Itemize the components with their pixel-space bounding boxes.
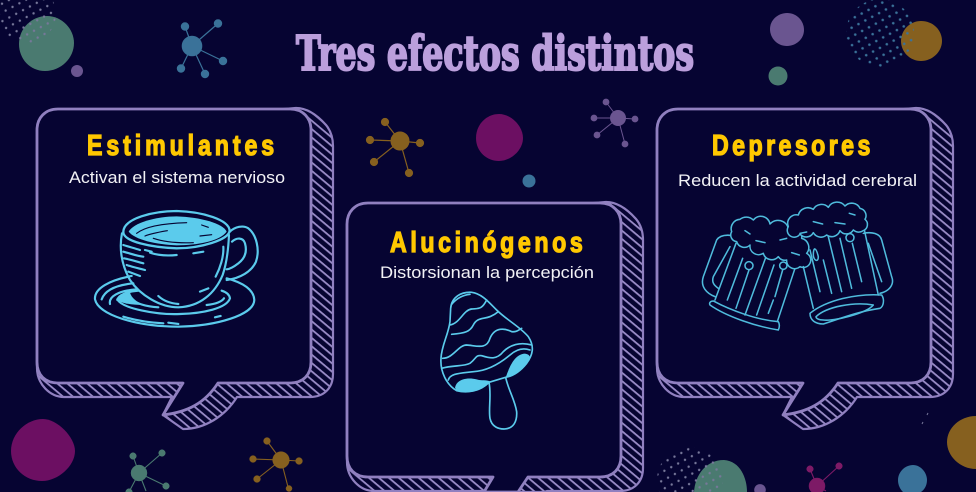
text: Reducen la actividad cerebral: Reducen la actividad cerebral bbox=[678, 172, 917, 190]
blob: magenta bottom left bbox=[11, 419, 75, 481]
blob: green top left bbox=[19, 16, 74, 71]
network icon: green bottom bbox=[126, 450, 169, 492]
speech bubble: Alucinógenos bbox=[347, 202, 643, 492]
blob: blue center bbox=[522, 174, 536, 188]
text: Distorsionan la percepción: Distorsionan la percepción bbox=[380, 264, 594, 282]
blob: green bottom bbox=[694, 460, 747, 492]
speech bubble: Depresores bbox=[657, 108, 953, 429]
panel: Estimulantes bbox=[37, 108, 333, 429]
network icon: magenta bottom bbox=[807, 463, 842, 492]
flecks bbox=[922, 413, 928, 424]
panel: Alucinógenos bbox=[347, 202, 643, 492]
text: Activan el sistema nervioso: Activan el sistema nervioso bbox=[69, 169, 285, 187]
network icon: purple bbox=[591, 99, 638, 147]
heading: Depresores: Depresores bbox=[712, 128, 870, 162]
icon: beer mugs bbox=[702, 202, 893, 330]
blob: magenta center bbox=[476, 114, 523, 161]
speech bubble: Estimulantes bbox=[37, 108, 333, 429]
blob: small purple bottom bbox=[754, 484, 766, 492]
dot cluster: top right bbox=[846, 0, 914, 67]
blob: gold top right bbox=[901, 21, 942, 61]
network icon: gold bottom bbox=[250, 438, 302, 492]
blob: purple top right bbox=[770, 13, 804, 46]
heading: Estimulantes: Estimulantes bbox=[87, 128, 274, 162]
heading: Alucinógenos: Alucinógenos bbox=[390, 225, 583, 259]
dot cluster: top left bbox=[0, 0, 56, 43]
blob: gold bottom right bbox=[947, 416, 976, 469]
panel: Depresores bbox=[657, 108, 953, 429]
network icon: gold center bbox=[366, 118, 424, 177]
blob: green top right bbox=[768, 66, 788, 86]
icon: coffee cup bbox=[95, 211, 258, 327]
network icon: blue bbox=[177, 20, 227, 78]
title: Tres efectos distintos bbox=[296, 26, 694, 82]
dot cluster: bottom bbox=[657, 447, 723, 492]
icon: mushroom bbox=[441, 292, 532, 429]
blob: small purple top left bbox=[71, 65, 83, 77]
blob: blue bottom right bbox=[898, 465, 927, 492]
